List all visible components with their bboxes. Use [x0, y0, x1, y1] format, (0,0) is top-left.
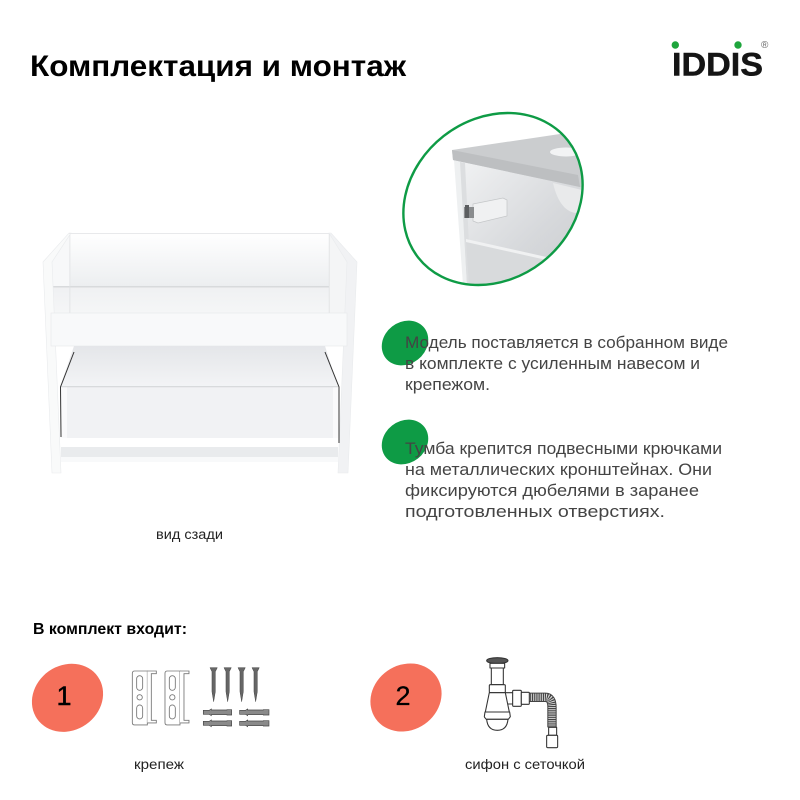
cabinet back wall [69, 233, 329, 287]
text block 1: крепежом. [405, 376, 490, 394]
cabinet bottom bar [61, 447, 338, 462]
cabinet, rear view [43, 233, 357, 473]
icon: mounting hardware [132, 668, 269, 727]
detail lens: hanging bracket close-up [402, 112, 584, 286]
cabinet lower interior [60, 346, 338, 387]
caption: siphon with strainer: сифон с сеточкой [465, 757, 585, 772]
caption: rear view: вид сзади [156, 527, 223, 542]
drawer front [61, 386, 338, 438]
cabinet right side panel [329, 233, 347, 313]
green blob 1 [373, 311, 437, 375]
logo: IDDIS: ® [761, 40, 769, 51]
cabinet upper shelf [50, 286, 329, 313]
heading: included in set: В комплект входит: [33, 621, 187, 638]
icon: siphon [484, 658, 558, 748]
cabinet top rail [51, 313, 347, 346]
text block 1: в комплекте с усиленным навесом и [405, 355, 700, 373]
text block 2: фиксируются дюбелями в заранее [405, 482, 699, 500]
caption: fasteners: крепеж [134, 757, 184, 772]
logo: IDDIS: IDDIS [672, 46, 763, 82]
title: Комплектация и монтаж [30, 50, 407, 83]
text block 2: на металлических кронштейнах. Они [405, 461, 712, 479]
text block 1: Модель поставляется в собранном виде [405, 334, 728, 352]
text block 2 [373, 410, 722, 521]
text block 2: Тумба крепится подвесными крючками [405, 440, 722, 458]
cabinet left side panel [52, 233, 70, 313]
green blob 2 [373, 410, 437, 474]
cabinet outer edges [43, 233, 357, 473]
text block 1 [373, 311, 728, 394]
icon: screws [210, 668, 259, 702]
badge 2 [357, 650, 455, 745]
text block 2: подготовленных отверстиях. [405, 503, 665, 521]
badge 2: 2 [395, 681, 411, 711]
icon: wall plugs [203, 709, 269, 727]
drawer runners [60, 352, 339, 443]
icon: brackets [132, 671, 189, 725]
badge 1 [19, 650, 116, 746]
badge 1: 1 [56, 681, 72, 711]
